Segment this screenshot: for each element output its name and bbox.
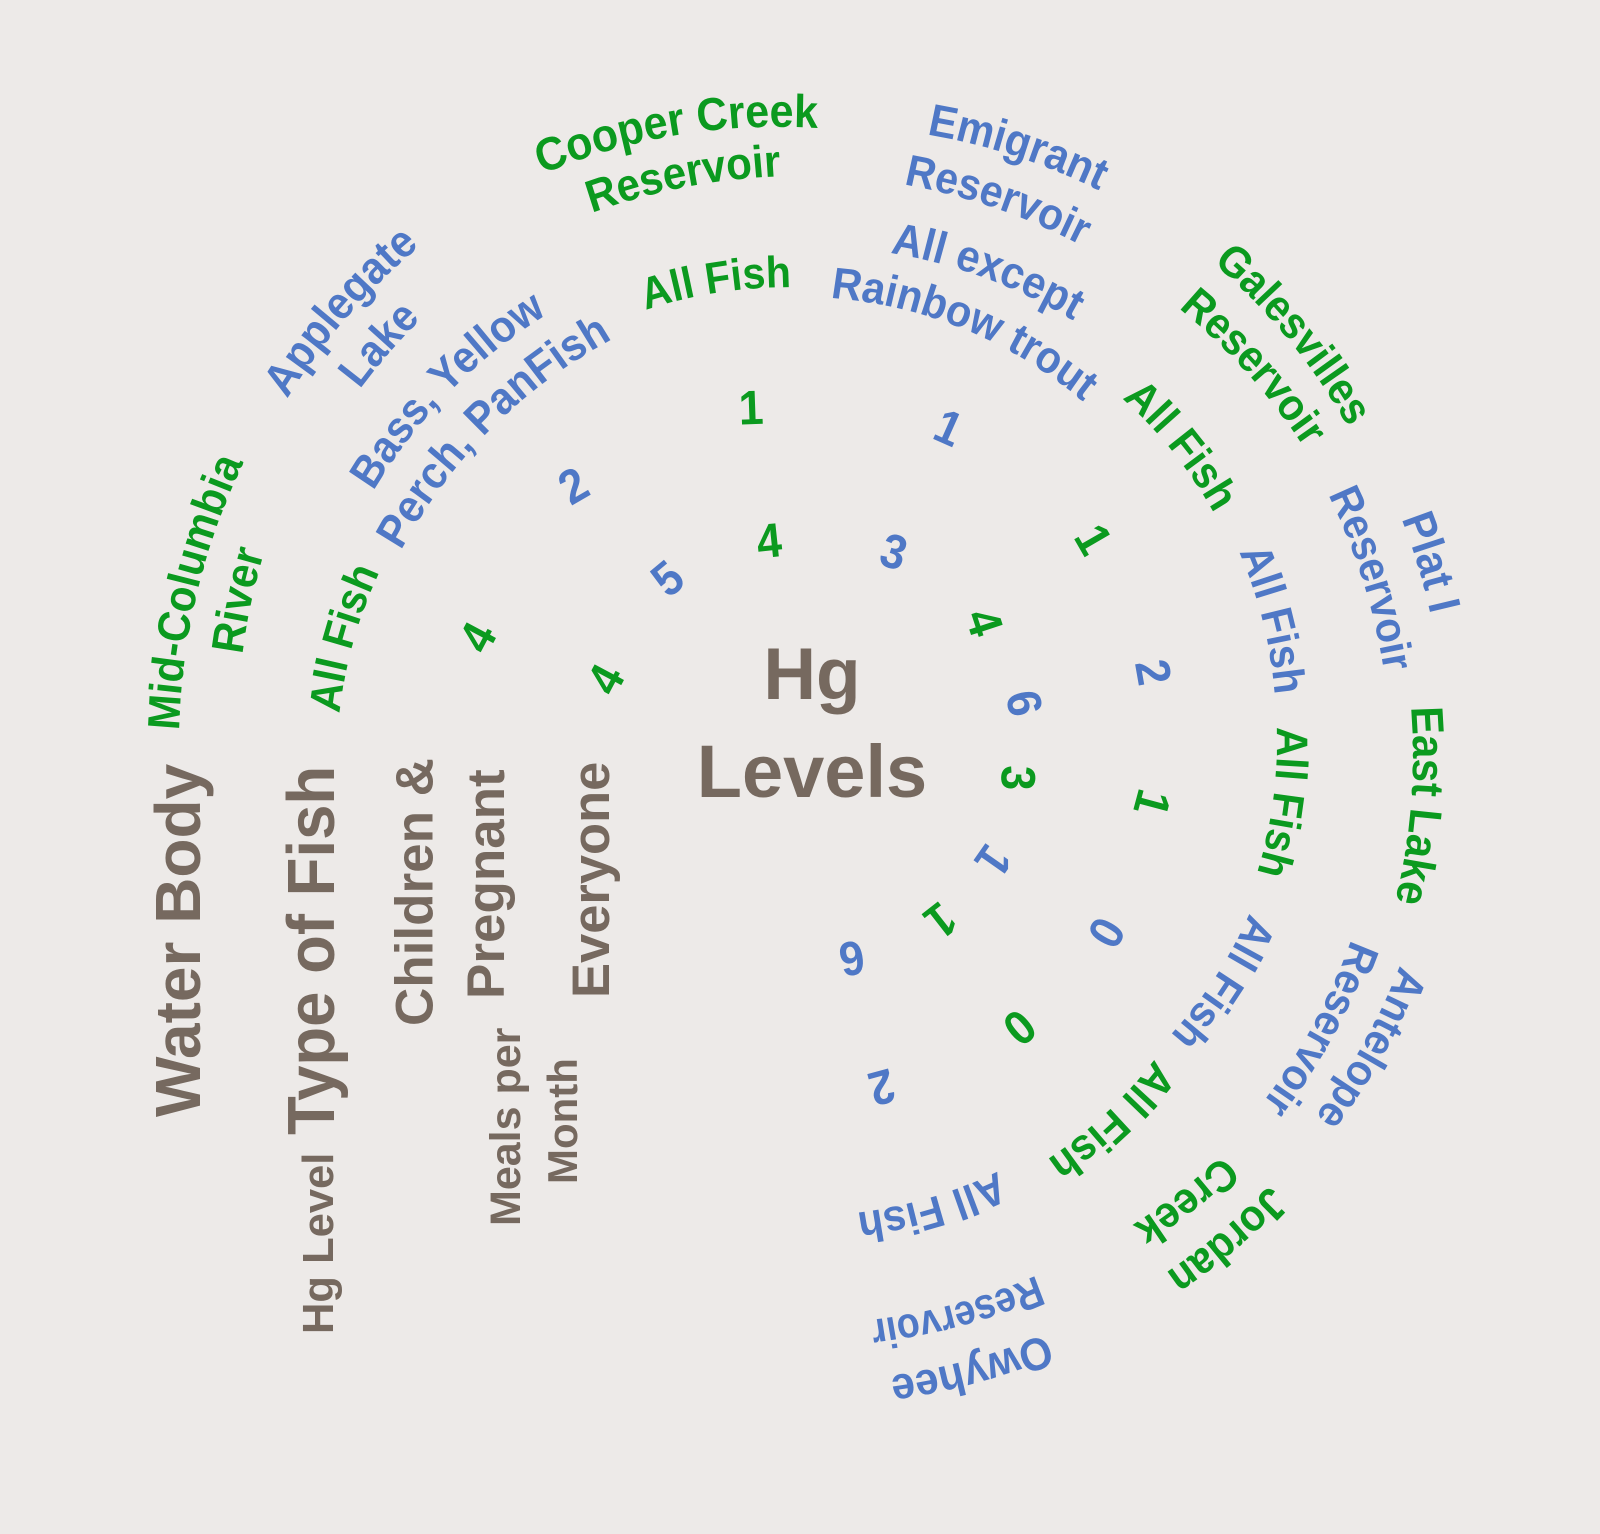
water body: Applegate Lake: Applegate [268,232,416,398]
value 4: 4 [448,614,507,661]
value 2: 2 [863,1058,901,1117]
fish type: Bass, Yellow Perch, PanFish: Bass, Yellow [349,294,543,489]
water body: Owyhee Reservoir [873,1276,1051,1399]
value 6: 6 [835,930,869,987]
ring: types of fish [310,224,1309,1242]
heading: Meals per Month [482,1027,586,1226]
fish type: All Fish (Plat I): All Fish [1240,552,1305,692]
water body: Emigrant Reservoir: Emigrant [929,104,1108,190]
water body: Mid-Columbia River: Mid-Columbia [148,458,244,728]
value 4: 4 [754,512,784,569]
value 3: 3 [874,522,914,581]
value 1: 1 [1064,515,1123,564]
water body: Plat I Reservoir [1330,484,1460,668]
heading: Children & Pregnant: Children & [386,758,445,1026]
value 1: 1 [738,380,764,435]
water body: Antelope Reservoir: Reservoir [1266,942,1378,1117]
water body: Plat I Reservoir: Plat I [1402,510,1460,612]
fish type: All Fish (East Lake): All Fish [1258,728,1309,876]
heading: Everyone: Everyone [562,762,621,998]
value 6: 6 [995,685,1053,721]
heading: Water Body: Water Body [142,763,214,1117]
water body: Antelope Reservoir: Antelope [1319,966,1424,1126]
water body: Jordan Creek [1132,1161,1286,1288]
title: Hg Levels: Levels [697,730,927,813]
fish type: All Fish (Owyhee): All Fish [859,1172,1000,1242]
water body: Mid-Columbia River: River [212,546,262,652]
heading: Meals per Month: Month [539,1058,586,1184]
water body: Galesvilles Reservoir: Reservoir [1180,286,1324,442]
value 1: 1 [964,835,1023,886]
heading: Children & Pregnant: Pregnant [457,769,516,999]
fish type: All Fish (Mid-Columbia): All Fish [310,567,378,713]
value 3: 3 [991,765,1046,791]
fish type: All Fish (Jordan Creek): All Fish [1048,1060,1171,1176]
fish type: All Fish (Galesvilles): All Fish [1123,384,1233,512]
water body: Jordan Creek: Creek [1132,1161,1236,1244]
title: Hg Levels: Hg [763,634,861,715]
fish type: Bass, Yellow Perch, PanFish: Perch, PanFish [376,319,610,548]
fish type: All except Rainbow trout: Rainbow trout [832,268,1097,402]
fish type: All except Rainbow trout: All except [891,224,1084,320]
ring: water bodies [148,94,1460,1399]
title: Hg Levels [697,634,927,813]
heading: Children & Pregnant [386,758,516,1026]
water body: Cooper Creek Reservoir: Cooper Creek [536,94,818,170]
column headings [142,758,621,1334]
water body: East Lake: East Lake [1396,708,1444,904]
water body: Cooper Creek Reservoir [536,94,818,212]
water body: Galesvilles Reservoir: Galesvilles [1220,246,1365,424]
heading: Meals per Month: Meals per [482,1027,530,1226]
water body: Owyhee Reservoir: Owyhee [892,1338,1051,1399]
water body: Applegate Lake: Lake [337,307,417,388]
value 2: 2 [1125,655,1182,689]
value 0: 0 [1077,908,1136,957]
water body: Plat I Reservoir: Reservoir [1330,484,1412,668]
water body: Emigrant Reservoir: Reservoir [906,155,1092,242]
value 2: 2 [549,456,598,515]
heading: Type of Fish: Type of Fish [274,766,348,1135]
value 0: 0 [993,999,1046,1056]
heading: Hg Level: Hg Level [295,1153,343,1334]
water body: Emigrant Reservoir [906,104,1108,242]
value 1: 1 [926,398,971,457]
value 5: 5 [641,550,694,607]
value 1: 1 [914,892,967,949]
value 1: 1 [1123,784,1182,822]
water body: Owyhee Reservoir: Reservoir [873,1276,1045,1348]
water body: Jordan Creek: Jordan [1168,1188,1286,1288]
water body: Cooper Creek Reservoir: Reservoir [584,144,780,212]
fish type: All Fish (Antelope): All Fish [1172,914,1272,1046]
value 4: 4 [576,656,635,703]
fish type: All Fish (Cooper Creek): All Fish [646,255,789,310]
numbers: meals per month, everyone ring [576,512,1053,987]
numbers: meals per month, children and pregnant ring [448,380,1182,1117]
value 4: 4 [955,602,1014,642]
